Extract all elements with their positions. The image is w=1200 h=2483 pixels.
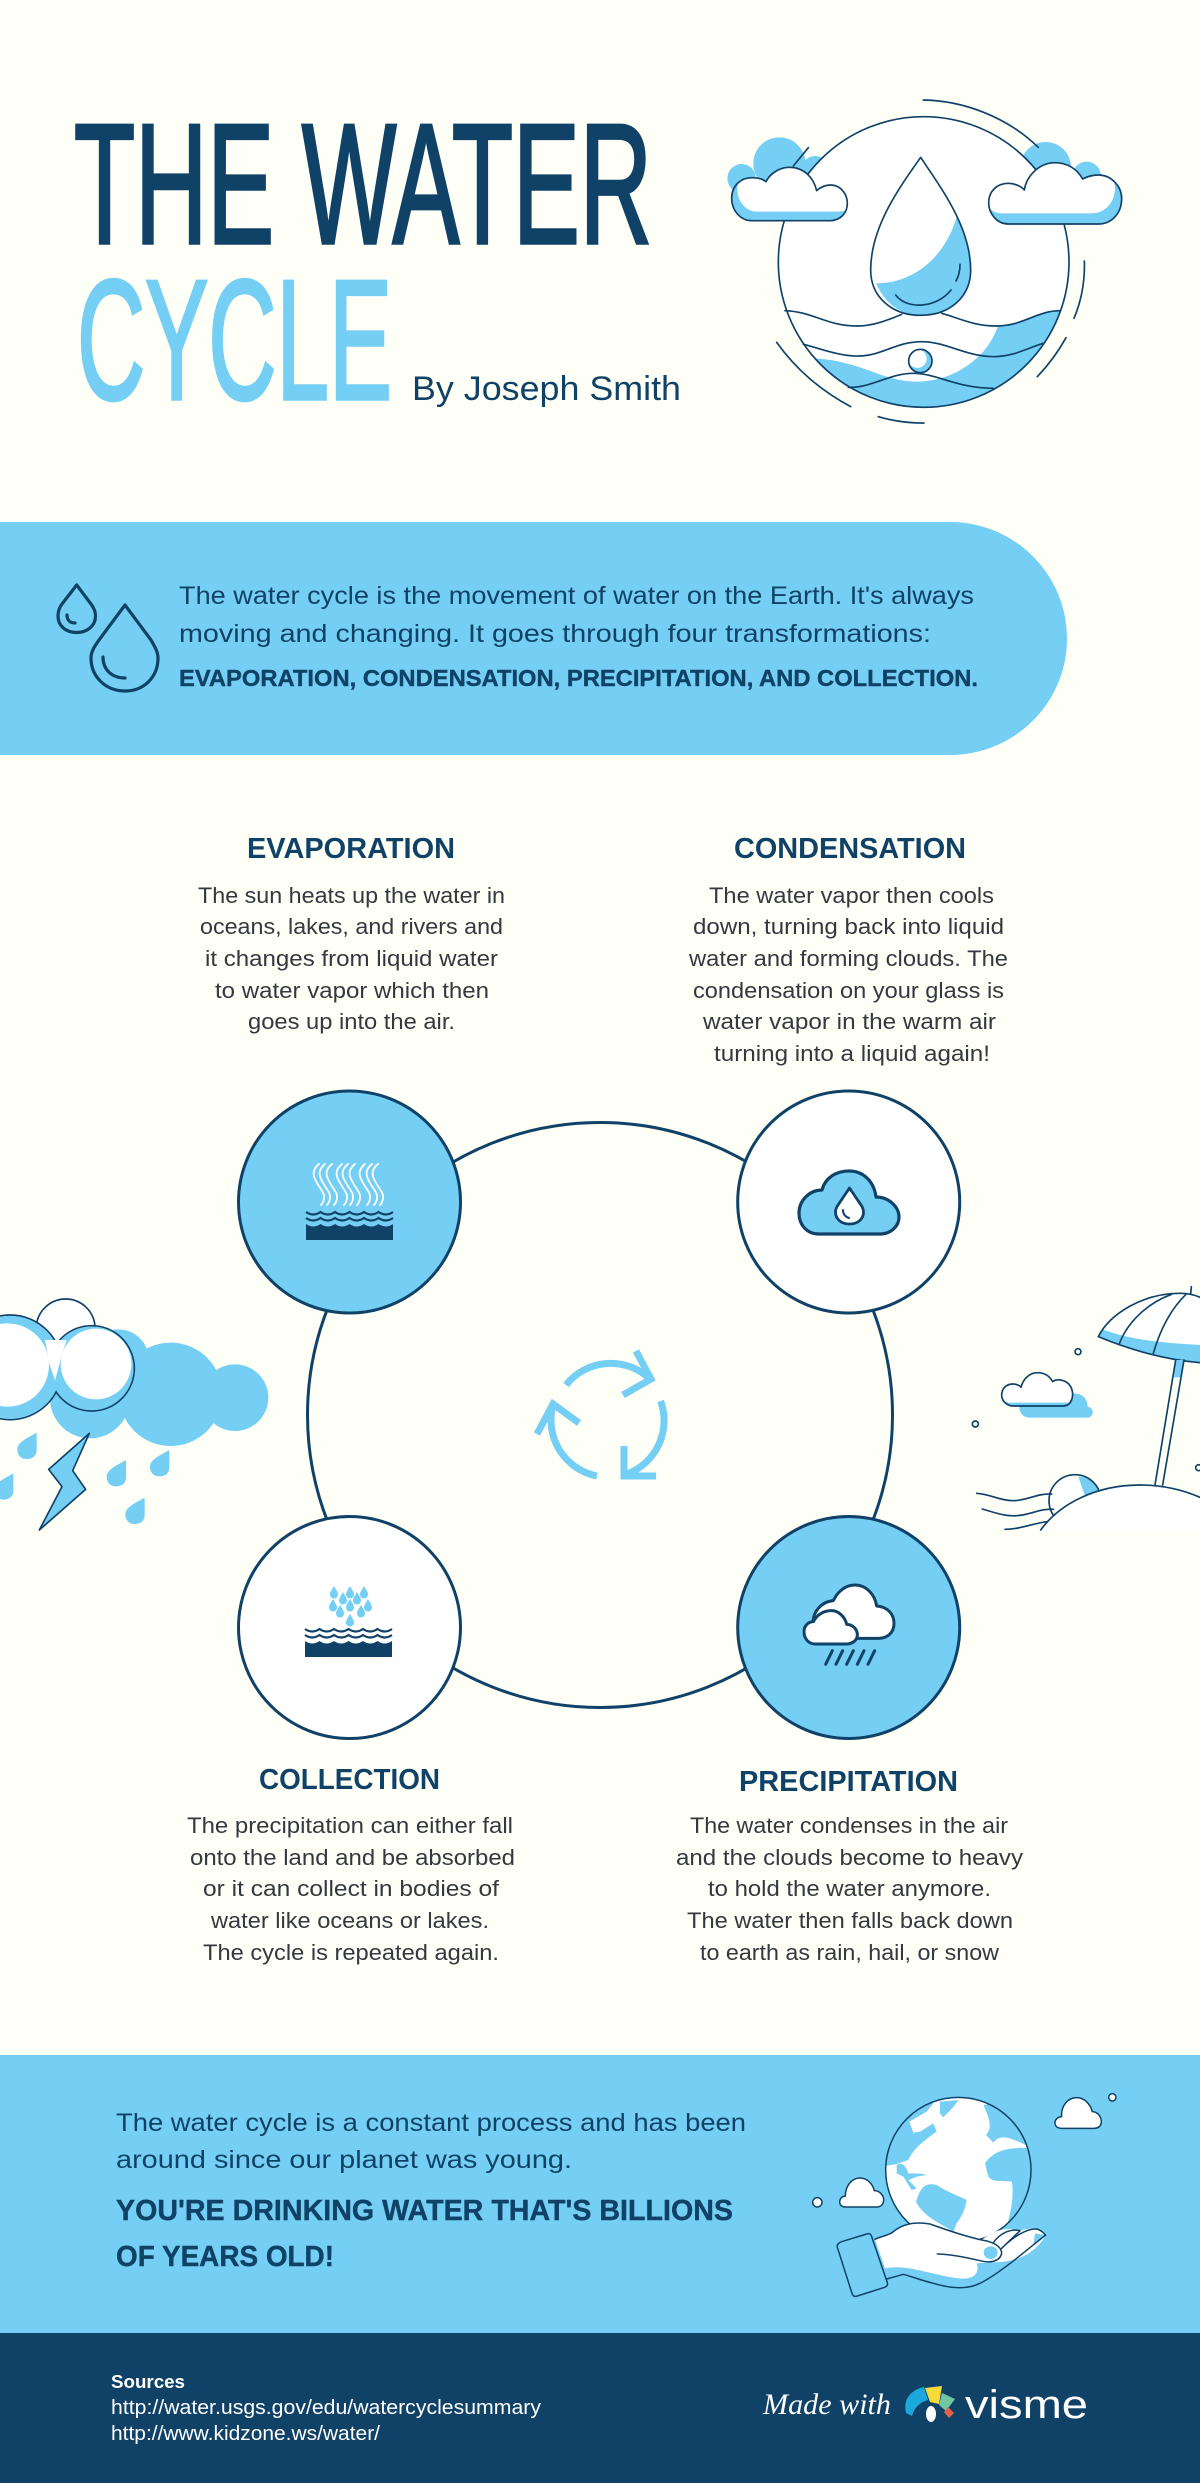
closing text: around since our planet was young. bbox=[116, 2146, 572, 2174]
icon: cloud with drop bbox=[799, 1171, 899, 1234]
text block: collection: water like oceans or lakes. bbox=[210, 1908, 489, 1933]
text block: evaporation: oceans, lakes, and rivers and bbox=[200, 914, 503, 939]
intro text bbox=[179, 582, 978, 691]
sources: Sources bbox=[111, 2372, 185, 2392]
icon: steam and water bbox=[306, 1164, 393, 1240]
closing text: OF YEARS OLD! bbox=[116, 2241, 334, 2273]
cycle diagram bbox=[238, 1091, 960, 1738]
text block: evaporation: to water vapor which then bbox=[215, 978, 489, 1003]
title: THE WATER bbox=[74, 89, 652, 280]
sources: http://water.usgs.gov/edu/watercyclesummary bbox=[111, 2397, 541, 2419]
sources bbox=[111, 2372, 541, 2445]
text block: evaporation: The sun heats up the water in bbox=[198, 883, 505, 908]
text block: condensation: turning into a liquid again! bbox=[714, 1041, 990, 1066]
text block: collection: The precipitation can either fall bbox=[187, 1813, 513, 1838]
illustration: water drop globe bbox=[720, 100, 1127, 447]
step: precipitation circle bbox=[738, 1516, 960, 1738]
closing text: YOU'RE DRINKING WATER THAT'S BILLIONS bbox=[116, 2195, 733, 2227]
closing text: The water cycle is a constant process and has been bbox=[116, 2109, 746, 2137]
text block: condensation: water vapor in the warm air bbox=[702, 1009, 996, 1034]
text block: collection: onto the land and be absorbed bbox=[190, 1845, 515, 1870]
text block: collection: COLLECTION bbox=[259, 1764, 440, 1796]
icon: water drops bbox=[58, 585, 158, 691]
text block: precipitation: The water then falls back down bbox=[687, 1908, 1013, 1933]
sources: http://www.kidzone.ws/water/ bbox=[111, 2423, 380, 2445]
illustration: beach bbox=[972, 1287, 1200, 1531]
text block: collection: The cycle is repeated again. bbox=[203, 1940, 499, 1965]
panel: intro band bbox=[0, 522, 1067, 755]
closing text bbox=[116, 2109, 746, 2273]
step: collection circle bbox=[238, 1516, 460, 1738]
intro text: The water cycle is the movement of water on the Earth. It's always bbox=[179, 582, 974, 610]
text block: evaporation: goes up into the air. bbox=[248, 1009, 455, 1034]
text block: condensation: down, turning back into liquid bbox=[693, 914, 1004, 939]
text block: collection: or it can collect in bodies of bbox=[203, 1876, 500, 1901]
text block: evaporation bbox=[198, 833, 505, 1034]
intro text: moving and changing. It goes through four transformations: bbox=[179, 620, 931, 648]
text block: precipitation: and the clouds become to heavy bbox=[676, 1845, 1023, 1870]
made with credit: Made with bbox=[762, 2388, 891, 2421]
step: condensation circle bbox=[738, 1091, 960, 1313]
visme wordmark: visme bbox=[965, 2383, 1088, 2427]
text block: condensation: condensation on your glass is bbox=[693, 978, 1004, 1003]
text block: condensation: water and forming clouds. The bbox=[688, 946, 1008, 971]
text block: condensation bbox=[688, 833, 1008, 1066]
ring bbox=[308, 1122, 892, 1708]
title bbox=[74, 89, 652, 436]
icon: cycle arrows bbox=[537, 1351, 664, 1476]
text block: condensation: CONDENSATION bbox=[734, 833, 966, 865]
text block: precipitation: to hold the water anymore. bbox=[708, 1876, 991, 1901]
step: evaporation circle bbox=[238, 1091, 460, 1313]
text block: condensation: The water vapor then cools bbox=[709, 883, 994, 908]
text block: collection bbox=[187, 1764, 515, 1965]
text block: evaporation: it changes from liquid water bbox=[205, 946, 498, 971]
illustration: globe in hand bbox=[813, 2093, 1116, 2296]
illustration: storm cloud bbox=[0, 1299, 268, 1530]
title: CYCLE bbox=[77, 245, 392, 436]
text block: precipitation: PRECIPITATION bbox=[739, 1766, 958, 1798]
icon: visme logo bbox=[905, 2386, 955, 2422]
panel: footer bbox=[0, 2333, 1200, 2483]
icon: rain over water bbox=[305, 1586, 392, 1657]
byline: By Joseph Smith bbox=[412, 370, 681, 408]
icon: clouds and rain bbox=[804, 1585, 894, 1664]
text block: precipitation: to earth as rain, hail, or snow bbox=[700, 1940, 999, 1965]
text block: precipitation bbox=[676, 1766, 1023, 1965]
text block: evaporation: EVAPORATION bbox=[247, 833, 455, 865]
intro text: EVAPORATION, CONDENSATION, PRECIPITATION, AND COLLECTION. bbox=[179, 665, 978, 691]
text block: precipitation: The water condenses in the air bbox=[690, 1813, 1008, 1838]
panel: closing band bbox=[0, 2055, 1200, 2333]
